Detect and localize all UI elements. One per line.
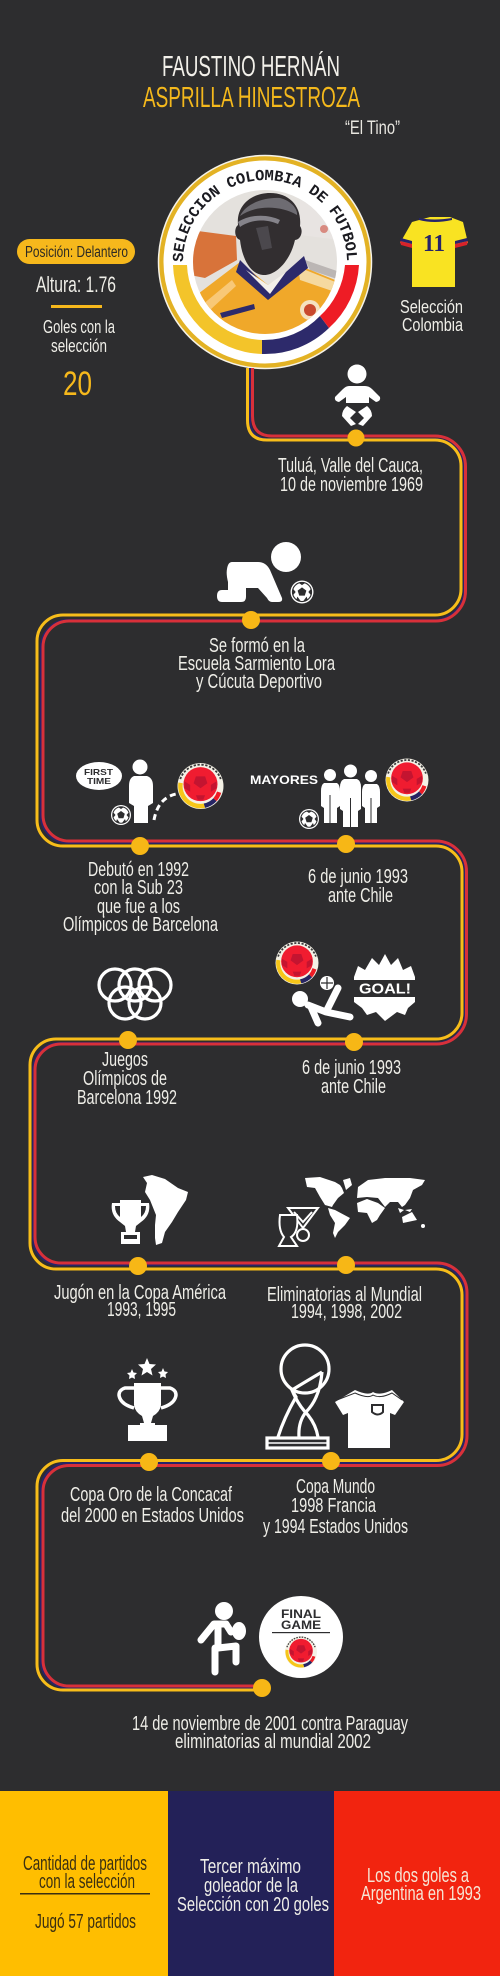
jersey label: Selección	[400, 297, 463, 317]
goals stat: 20	[63, 365, 92, 403]
icon: crawling baby with ball	[217, 542, 314, 604]
icon: olympic rings	[99, 969, 171, 1019]
icon: jersey number 11: 11	[423, 231, 445, 257]
panel: matches played: con la selección	[39, 1871, 135, 1893]
icon: shirt	[335, 1390, 404, 1448]
timeline path	[30, 368, 467, 1690]
icon: trophy and South America	[112, 1175, 188, 1245]
text: World Cups: y 1994 Estados Unidos	[263, 1516, 408, 1538]
text: training: Se formó en la	[209, 635, 306, 657]
text: birth	[278, 455, 423, 496]
position pill	[17, 239, 135, 264]
badge: player portrait	[158, 154, 372, 370]
position pill: Posición: Delantero	[25, 244, 128, 261]
text: match against Chile: 6 de junio 1993	[302, 1057, 401, 1079]
text: World Cup qualifiers: Eliminatorias al Mundial	[267, 1284, 422, 1306]
icon: goal	[276, 942, 415, 1023]
text: training: Escuela Sarmiento Lora	[178, 653, 336, 675]
text: World Cups: Copa Mundo	[296, 1476, 375, 1498]
text: World Cups: 1998 Francia	[291, 1495, 377, 1517]
text: World Cups	[263, 1476, 408, 1538]
panel: matches played: Cantidad de partidos	[23, 1853, 147, 1875]
text: first senior match: ante Chile	[328, 885, 393, 907]
text: Copa America: Jugón en la Copa América	[54, 1282, 227, 1304]
text: Copa America: 1993, 1995	[107, 1299, 176, 1321]
icon: first time debut: TIME	[87, 776, 111, 786]
text: World Cup qualifiers: 1994, 1998, 2002	[291, 1301, 402, 1323]
icon: gold cup trophy with stars	[119, 1358, 176, 1441]
icon: World Cup trophy	[267, 1345, 329, 1448]
text: Barcelona games: Olímpicos de	[83, 1068, 167, 1090]
text: training	[178, 635, 336, 693]
icon: world map and medal	[279, 1177, 425, 1246]
title: FAUSTINO HERNÁN	[162, 50, 340, 83]
text: Barcelona games: Juegos	[102, 1049, 148, 1071]
panel: goals against Argentina	[334, 1791, 500, 1976]
text: final match	[132, 1713, 408, 1753]
icon: first time debut: FIRST	[84, 767, 114, 777]
goals stat	[43, 305, 116, 403]
icon: mayores team: MAYORES	[250, 773, 318, 787]
panel: third top scorer: goleador de la	[204, 1875, 299, 1897]
icon: final game badge: GAME	[281, 1618, 321, 1632]
jersey label: Colombia	[402, 315, 464, 335]
icon: goal: GOAL!	[359, 980, 411, 998]
nickname: “El Tino”	[345, 118, 400, 139]
text: Barcelona games	[77, 1049, 177, 1109]
text: Gold Cup: del 2000 en Estados Unidos	[61, 1505, 244, 1527]
height stat: Altura: 1.76	[36, 272, 116, 297]
text: Gold Cup	[61, 1484, 244, 1527]
text: first senior match: 6 de junio 1993	[308, 866, 408, 888]
icon: mayores team	[250, 758, 428, 829]
goals stat: selección	[51, 336, 107, 356]
text: debut: Olímpicos de Barcelona	[63, 914, 219, 936]
icon: baby	[335, 364, 380, 426]
panel: matches played	[0, 1791, 168, 1976]
text: first senior match	[308, 866, 408, 907]
icon: final game badge	[259, 1596, 343, 1678]
text: match against Chile	[302, 1057, 401, 1098]
panel: third top scorer	[168, 1791, 334, 1976]
panel: third top scorer: Selección con 20 goles	[177, 1894, 329, 1916]
text: training: y Cúcuta Deportivo	[196, 671, 322, 693]
icon: player juggling ball	[201, 1602, 246, 1672]
text: final match: 14 de noviembre de 2001 contra Paraguay	[132, 1713, 408, 1735]
panel: matches played: Jugó 57 partidos	[35, 1911, 136, 1933]
text: debut: con la Sub 23	[94, 877, 183, 899]
jersey label	[400, 297, 464, 335]
timeline dots	[119, 430, 364, 1697]
icon: final game badge: FINAL	[281, 1607, 321, 1621]
badge ring text: SELECCION COLOMBIA DE FUTBOL	[172, 170, 357, 262]
text: debut	[63, 859, 219, 936]
title: ASPRILLA HINESTROZA	[143, 82, 360, 114]
text: final match: eliminatorias al mundial 2002	[175, 1731, 371, 1753]
text: debut: Debutó en 1992	[88, 859, 189, 881]
panel: third top scorer: Tercer máximo	[200, 1856, 301, 1878]
badge portrait photo	[190, 188, 340, 340]
text: World Cup qualifiers	[267, 1284, 422, 1323]
icon: jersey number 11	[400, 217, 468, 287]
icon: first time debut	[76, 760, 224, 825]
text: Gold Cup: Copa Oro de la Concacaf	[70, 1484, 232, 1506]
title	[143, 50, 360, 114]
text: debut: que fue a los	[97, 896, 180, 918]
text: birth: Tuluá, Valle del Cauca,	[278, 455, 423, 477]
text: match against Chile: ante Chile	[321, 1076, 386, 1098]
goals stat: Goles con la	[43, 317, 116, 337]
text: Barcelona games: Barcelona 1992	[77, 1087, 177, 1109]
badge colour arcs	[173, 265, 359, 354]
text: Copa America	[54, 1282, 227, 1321]
text: birth: 10 de noviembre 1969	[280, 474, 423, 496]
